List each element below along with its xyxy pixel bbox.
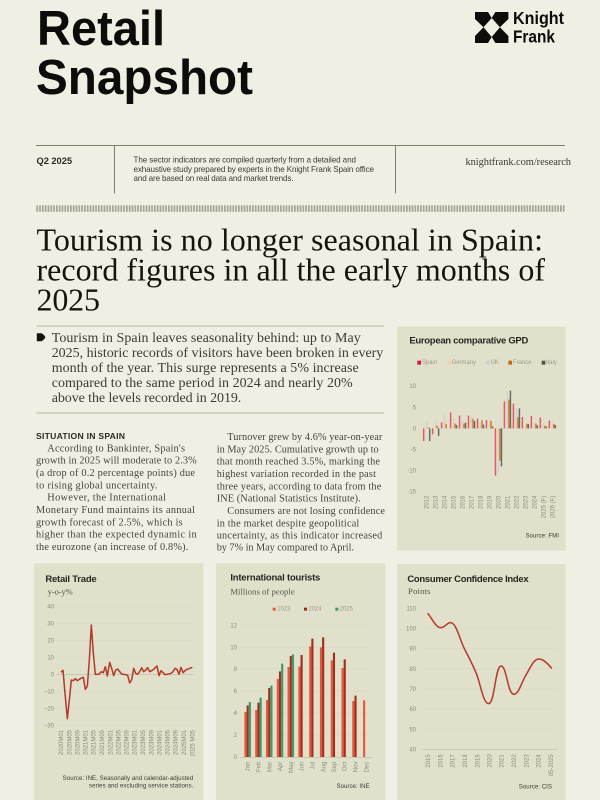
title: Retail Snapshot: Snapshot [36, 51, 253, 105]
article column: turnover and consumers: Turnover grew by 4.6% year-on-year [227, 432, 383, 443]
lead paragraph: Tourism in Spain leaves seasonality behind: up to May [52, 331, 361, 346]
x axis labels: 2017 [451, 754, 457, 768]
x axis labels: 2018 [463, 754, 469, 768]
x axis labels: Jan [246, 762, 252, 771]
lead paragraph: compared to the same period in 2024 and nearly 20% [52, 376, 353, 391]
article column: situation in Spain: growth in 2025 will moderate to 2.3% [36, 456, 197, 467]
y axis labels: 0 [413, 426, 417, 432]
x axis labels [426, 754, 555, 776]
intro description [134, 156, 374, 183]
y axis labels: 80 [409, 667, 417, 673]
x axis labels: 2021M05 [92, 729, 98, 755]
x axis labels: 2020 [487, 754, 493, 768]
article column: turnover and consumers: in May 2025. Cumulative growth up to [217, 444, 379, 455]
y axis labels: 50 [409, 727, 417, 733]
x axis labels: 2022 [512, 754, 518, 768]
headline: record figures in all the early months of [36, 252, 545, 288]
y axis labels: -10 [407, 469, 417, 475]
x axis labels: 2025 M05 [190, 729, 196, 757]
logo: Knight Frank: Frank [513, 26, 555, 46]
chart title: European comparative GPD [409, 335, 528, 346]
chart title: International tourists [230, 573, 320, 584]
x axis labels: 2022M05 [116, 729, 122, 755]
legend: Spain [422, 360, 437, 366]
y axis labels: 30 [47, 621, 55, 627]
legend [273, 606, 354, 612]
x axis labels: 2013 [434, 495, 440, 509]
article column: situation in Spain: (a drop of 0.2 percentage points) due [36, 468, 195, 479]
panel: Consumer Confidence Index [397, 564, 566, 800]
x axis labels: 2023 [524, 754, 530, 768]
x axis labels: 2024M09 [174, 729, 180, 755]
x axis labels: 2020 [496, 495, 502, 509]
article column: situation in Spain: According to Bankinter, Spain's [47, 443, 185, 454]
bar chart: monthly tourists [245, 637, 364, 757]
x axis labels: 2026 (F) [550, 496, 556, 518]
headline [36, 222, 545, 318]
y axis labels: 10 [230, 645, 238, 651]
legend [417, 360, 557, 366]
intro description: exhaustive study prepared by experts in the Knight Frank Spain office [134, 165, 374, 174]
unit label: Millions of people [230, 586, 295, 596]
intro description: The sector indicators are compiled quarterly from a detailed and [134, 156, 356, 164]
x axis labels: 2022 [514, 495, 520, 509]
x axis labels: 2023M01 [133, 729, 139, 755]
x axis labels: 2021M01 [84, 729, 90, 755]
x axis labels: 2022M09 [125, 729, 131, 755]
legend: 2025 [340, 606, 354, 612]
headline: Tourism is no longer seasonal in Spain: [36, 222, 543, 258]
y axis labels: 90 [409, 647, 417, 653]
x axis labels: 2022M01 [108, 729, 114, 755]
source note [63, 775, 194, 790]
y axis labels: 12 [230, 623, 238, 629]
article column: turnover and consumers: Consumers are not losing confidence [227, 506, 385, 517]
lead paragraph: above the levels recorded in 2019. [52, 391, 241, 406]
source note: series and excluding service stations. [89, 783, 194, 790]
article column: turnover and consumers: highest variation recorded in the past [217, 469, 376, 480]
x axis labels: Feb [257, 761, 263, 772]
source note: Source: INE [336, 783, 370, 790]
title: Retail Snapshot [36, 2, 253, 105]
y axis labels: −30 [44, 724, 55, 730]
x axis labels: 2020M01 [59, 729, 65, 755]
y axis labels: 8 [234, 667, 238, 673]
x axis labels: Sep [332, 761, 338, 772]
intro description: and are based on real data and market trends. [134, 174, 294, 183]
lead paragraph: 2025, historic records of visitors have been broken in every [52, 346, 383, 361]
x axis labels: 2015 [452, 495, 458, 509]
x axis labels: 2020M05 [67, 729, 73, 755]
y axis labels: 10 [47, 656, 55, 662]
legend: 2024 [308, 606, 322, 612]
x axis labels: 2025 (F) [541, 496, 547, 518]
source note: Source: FMI [525, 532, 559, 539]
website link: knightfrank.com/research [466, 157, 572, 168]
x axis labels: 2024 [532, 495, 538, 509]
chart title: Consumer Confidence Index [407, 574, 529, 585]
x axis labels: Mar [267, 762, 273, 772]
x axis labels: 2019 [475, 754, 481, 768]
article column: turnover and consumers [217, 432, 385, 554]
y axis labels: 40 [409, 747, 417, 753]
x axis labels: 2021 [500, 754, 506, 768]
x axis labels: May [289, 762, 295, 773]
x axis labels: 2014 [443, 495, 449, 509]
x axis labels: 2018 [479, 495, 485, 509]
x axis labels: Apr [278, 762, 284, 771]
x axis labels: 2023M05 [141, 729, 147, 755]
y axis labels [230, 623, 238, 761]
x axis labels: Nov [354, 762, 360, 772]
article column: situation in Spain: higher than the expected dynamic in [36, 530, 197, 541]
line chart: retail trade growth [61, 625, 192, 719]
article column: turnover and consumers: that month reached 3.5%, marking the [217, 457, 380, 468]
y axis labels: -5 [411, 448, 417, 454]
y axis labels: 60 [409, 707, 417, 713]
legend: UK [491, 360, 499, 366]
x axis labels: 2023M09 [149, 729, 155, 755]
y axis labels: 10 [409, 384, 417, 390]
source note: Source: INE, Seasonally and calendar-adjusted [63, 775, 194, 782]
y axis labels: -15 [407, 490, 417, 496]
x axis labels: 2012 [425, 495, 431, 509]
line chart: consumer confidence [428, 614, 551, 704]
x axis labels [59, 729, 196, 757]
x axis labels: 2024M05 [166, 729, 172, 755]
x axis labels [425, 495, 556, 518]
y axis labels: 100 [406, 627, 417, 633]
unit label: Points [408, 586, 431, 596]
y axis labels: 110 [406, 607, 417, 613]
x axis labels: 2021 [505, 495, 511, 509]
y axis labels: −20 [44, 707, 55, 713]
y axis labels: 5 [413, 405, 417, 411]
panel: Retail Trade [34, 563, 203, 800]
y axis labels: 40 [47, 604, 55, 610]
article column: situation in Spain: Monetary Fund maintains its annual [36, 505, 195, 516]
legend: 2023 [277, 606, 291, 612]
x axis labels: 2021M09 [100, 729, 106, 755]
y axis labels [44, 604, 55, 730]
x axis labels: 2019 [488, 495, 494, 509]
article column: turnover and consumers: uncertainty, as this indicator increased [217, 531, 383, 542]
article column: turnover and consumers: in the market despite geopolitical [217, 518, 359, 529]
logo: Knight Frank [475, 8, 564, 46]
x axis labels: 2020M09 [75, 729, 81, 755]
y axis labels: 0 [234, 755, 238, 761]
x axis labels: 2017 [470, 495, 476, 509]
panel: European comparative GDP [397, 327, 566, 551]
y axis labels: 0 [51, 672, 55, 678]
article column: situation in Spain: the eurozone (an increase of 0.8%). [36, 542, 188, 553]
article column: situation in Spain [36, 431, 197, 553]
article column: situation in Spain: growth forecast of 2.5%, which is [36, 517, 183, 528]
x axis labels: 2025M01 [182, 729, 188, 755]
y axis labels: 2 [234, 733, 238, 739]
x axis labels: Jun [300, 762, 306, 771]
article column: turnover and consumers: three years, according to data from the [217, 481, 382, 492]
y axis labels: 20 [47, 639, 55, 645]
bar chart: GDP growth by country [424, 391, 555, 476]
x axis labels [246, 761, 370, 773]
x axis labels: 2023 [523, 495, 529, 509]
logo: Knight Frank: Knight [513, 8, 564, 28]
y axis labels [406, 607, 417, 753]
legend: Germany [452, 360, 476, 366]
title: Retail Snapshot: Retail [37, 2, 165, 56]
x axis labels: 2024M01 [157, 729, 163, 755]
source note: Source: CIS [519, 783, 552, 790]
lead paragraph [36, 326, 384, 413]
y axis labels: 6 [234, 689, 238, 695]
x axis labels: 2024 [537, 754, 543, 768]
headline: 2025 [36, 282, 100, 318]
y axis labels: −10 [44, 689, 55, 695]
issue label: Q2 2025: Q2 2025 [36, 156, 72, 166]
article column: turnover and consumers: INE (National Statistics Institute). [217, 494, 361, 505]
unit label: y-o-y% [48, 586, 73, 596]
article column: turnover and consumers: by 7% in May compared to April. [217, 543, 354, 554]
x axis labels: Aug [321, 762, 327, 772]
x axis labels: Jul [310, 762, 316, 769]
panel: International tourists [216, 563, 385, 800]
x axis labels: 2016 [438, 754, 444, 768]
x axis labels: 05-2025 [549, 754, 555, 776]
article column: situation in Spain: to rising global uncertainty. [36, 480, 157, 491]
y axis labels: 4 [234, 711, 238, 717]
x axis labels: 2016 [461, 495, 467, 509]
legend: Italy [546, 360, 557, 366]
article column: situation in Spain: However, the International [47, 493, 166, 504]
lead paragraph: month of the year. This surge represents a 5% increase [52, 361, 359, 376]
chart title: Retail Trade [45, 574, 97, 585]
article column: situation in Spain: SITUATION IN SPAIN [36, 431, 125, 441]
x axis labels: Dec [364, 762, 370, 772]
x axis labels: Oct [343, 761, 349, 771]
legend: France [513, 360, 532, 366]
x axis labels: 2015 [426, 754, 432, 768]
y axis labels [407, 384, 417, 496]
y axis labels: 70 [409, 687, 417, 693]
